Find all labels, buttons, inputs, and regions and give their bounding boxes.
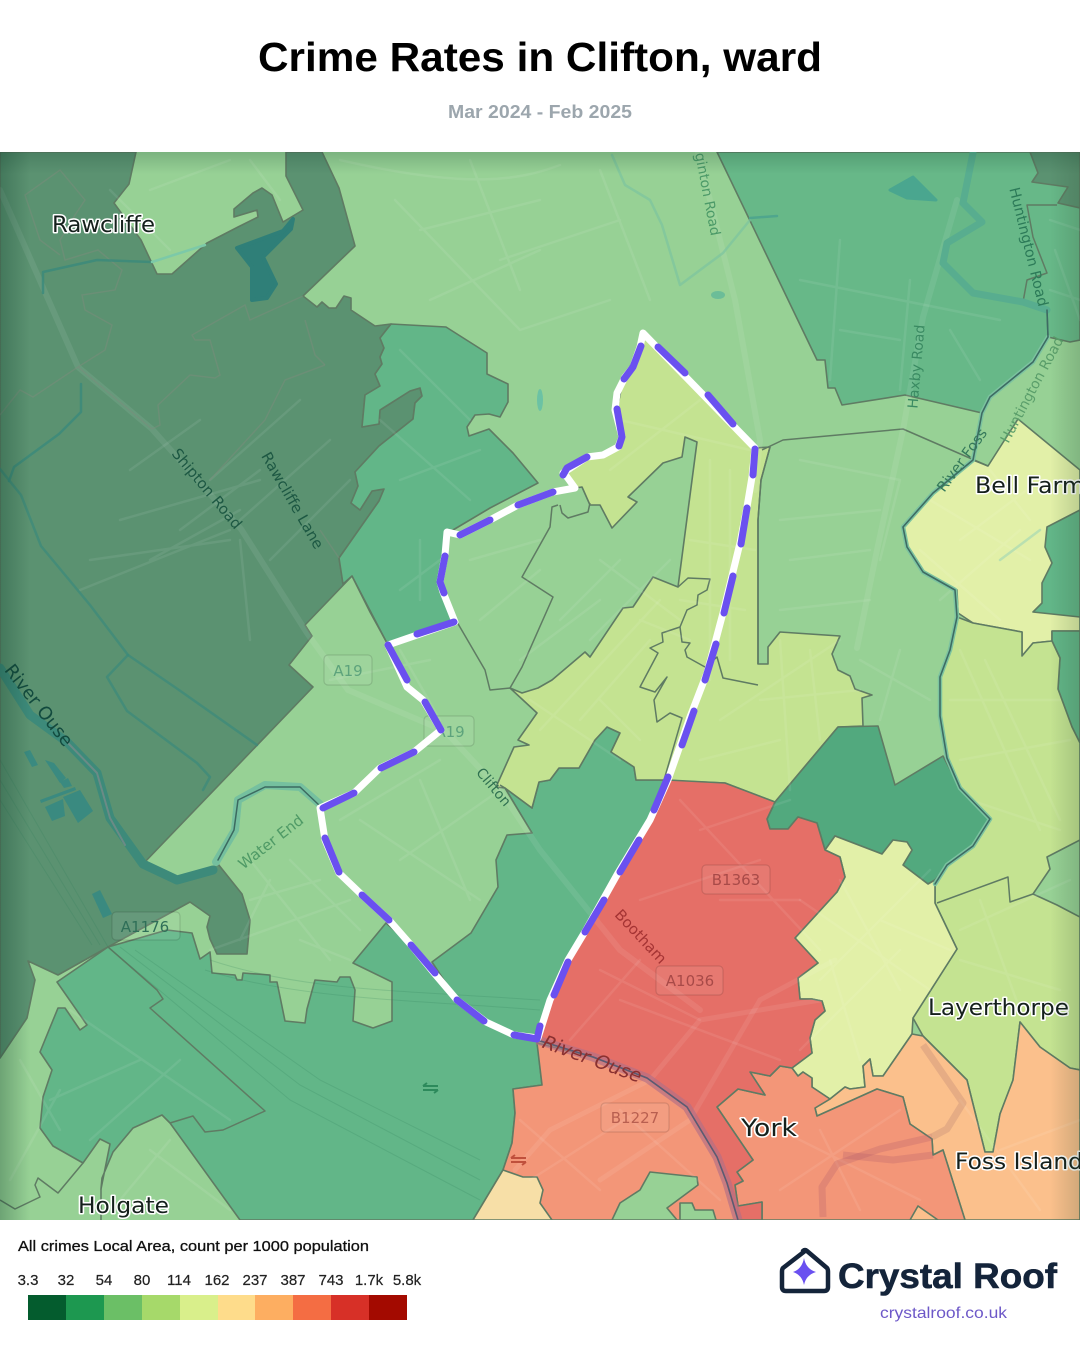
region: pale orange patch — [473, 1170, 552, 1220]
region: salmon York centre — [717, 1066, 965, 1220]
road and river labels: ginton Road — [691, 151, 723, 237]
place label: Layerthorpe: Layerthorpe — [928, 996, 1069, 1021]
region: yellow-green central Clifton — [496, 333, 872, 808]
river Foss — [903, 153, 1048, 884]
river Ouse north — [0, 668, 322, 880]
region: salmon west of River Ouse — [473, 1043, 738, 1220]
road shield: A1036: A1036 — [666, 972, 714, 990]
road shield: A19 west — [324, 655, 372, 685]
ward boundary: Clifton — [320, 333, 755, 1039]
icon: house with star — [782, 1250, 828, 1291]
road shield: B1363: B1363 — [712, 871, 760, 889]
region: pale yellow Guildhall — [792, 836, 957, 1099]
region: light green pockets — [612, 1172, 938, 1220]
place label: Rawcliffe: Rawcliffe — [52, 213, 155, 238]
road and river labels: River Ouse — [539, 1031, 645, 1087]
city wall and railway bands — [822, 1045, 963, 1217]
region: darker green Haxby Road south — [767, 726, 990, 884]
legend scale values: 387 — [280, 1272, 306, 1289]
paths in Rawcliffe — [0, 170, 339, 558]
road shield: B1363 — [702, 865, 770, 894]
road shield: B1227: B1227 — [611, 1109, 659, 1127]
lakes and ponds — [24, 177, 936, 918]
railway station icons — [423, 1083, 526, 1165]
region: red Bootham — [537, 780, 845, 1220]
road and river labels: Huntington Road — [998, 334, 1067, 446]
road shield: A19 east — [424, 716, 474, 746]
legend scale values: 237 — [242, 1272, 268, 1289]
road and river labels: Water End — [235, 811, 307, 873]
logo wordmark: Crystal Roof — [838, 1257, 1057, 1296]
region: mid green south-west (station) — [40, 923, 542, 1220]
road and river labels: Haxby Road — [905, 324, 929, 409]
map edge vignette — [0, 152, 1080, 1220]
place label: Foss Island: Foss Island — [955, 1150, 1080, 1175]
base area: light green neighbourhoods — [0, 152, 1080, 1220]
choropleth map — [0, 151, 1080, 1220]
road shields — [112, 655, 770, 1132]
legend scale values: 54 — [96, 1272, 112, 1289]
legend scale values: 1.7k — [355, 1272, 384, 1289]
place label: York: York — [740, 1114, 797, 1142]
road shield: B1227 — [601, 1103, 669, 1132]
region: mid green southern ward — [432, 727, 668, 1040]
region: orange Foss Island — [815, 1022, 1080, 1220]
road shield: A1036 — [656, 966, 723, 995]
place label: Bell Farm: Bell Farm — [975, 474, 1080, 499]
legend scale values: 743 — [318, 1272, 344, 1289]
legend scale values: 5.8k — [393, 1272, 422, 1289]
road shield: A1176: A1176 — [121, 918, 169, 936]
road and river labels — [0, 151, 1067, 1087]
road and river labels: Rawcliffe Lane — [257, 449, 327, 552]
road and river labels: River Ouse — [0, 660, 77, 751]
legend colour swatches — [28, 1295, 407, 1320]
title: Crime Rates in Clifton, ward — [258, 34, 822, 80]
legend scale values: 162 — [204, 1272, 230, 1289]
legend scale values: 114 — [167, 1272, 191, 1289]
region: mid green block by Bell Farm — [1033, 510, 1080, 617]
region: darkest green Rawcliffe area — [0, 152, 422, 1058]
legend scale values: 3.3 — [18, 1272, 38, 1289]
place label: Holgate: Holgate — [78, 1194, 169, 1219]
legend scale values: 80 — [134, 1272, 150, 1289]
region: pale yellow Bell Farm — [903, 419, 1080, 656]
region: mid green north of ward — [339, 324, 538, 643]
internal neighbourhood boundaries — [0, 205, 1057, 1220]
road and river labels: Bootham — [611, 906, 670, 968]
railway lines — [0, 760, 540, 1200]
legend scale values: 32 — [58, 1272, 74, 1289]
legend — [18, 1238, 422, 1320]
road shield: A19 west: A19 — [333, 662, 363, 680]
streams — [0, 155, 1040, 790]
legend heading: All crimes Local Area, count per 1000 population — [18, 1238, 369, 1255]
legend scale values — [18, 1272, 422, 1289]
region: mid green north-east (Haxby Road) — [717, 152, 1080, 413]
road and river labels: Shipton Road — [168, 445, 246, 533]
website url: crystalroof.co.uk — [880, 1305, 1008, 1322]
road and river labels: Huntington Road — [1005, 186, 1050, 308]
river Ouse through city — [537, 1040, 738, 1220]
road shield: A1176 — [112, 912, 180, 940]
roads: faint street network — [0, 152, 1080, 1210]
region: light green block far east — [1033, 840, 1080, 917]
region: dark corner top right — [1030, 152, 1080, 208]
subtitle: date range: Mar 2024 - Feb 2025 — [448, 102, 632, 122]
region: mid green block east — [1052, 631, 1080, 743]
road and river labels: River Foss — [935, 426, 991, 495]
region: yellow-green east of River Foss — [913, 617, 1080, 1152]
logo: Crystal Roof — [782, 1250, 1057, 1322]
road shield: A19 east: A19 — [435, 723, 465, 741]
road and river labels: Clifton — [472, 765, 514, 810]
